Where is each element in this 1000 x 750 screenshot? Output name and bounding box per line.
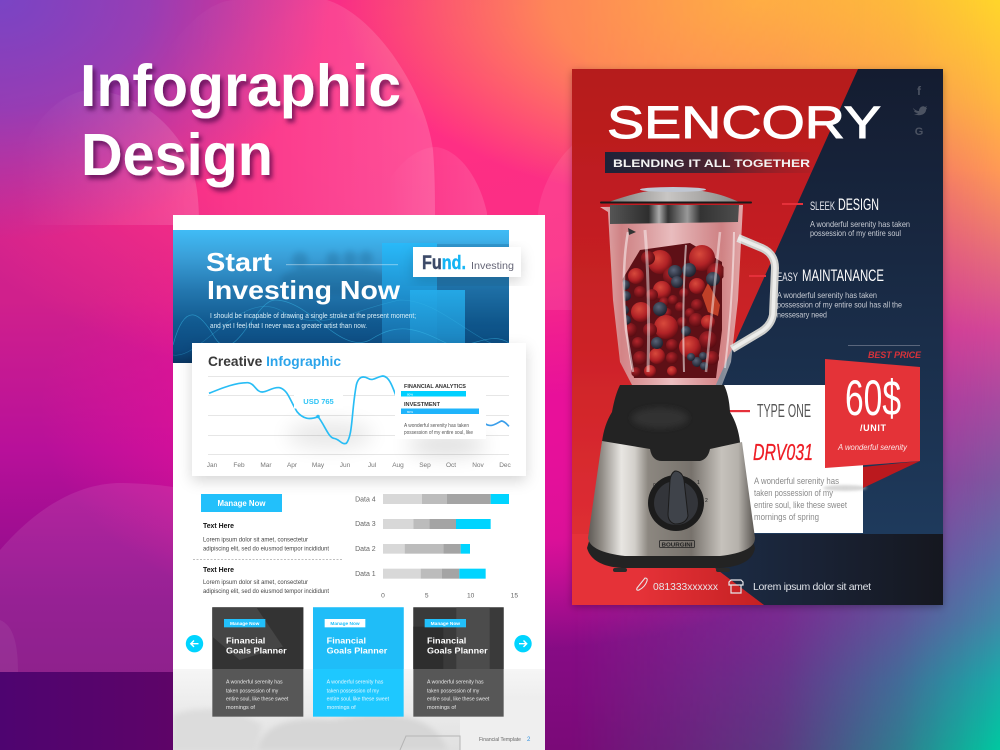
card: financial goals planner middle: Goals Planner: [327, 646, 388, 656]
month axis labels: Oct: [446, 462, 456, 469]
product description: [754, 476, 847, 523]
month axis labels: Apr: [287, 462, 298, 469]
chart heading: Creative Infographic: [208, 353, 341, 369]
product description: mornings of spring: [754, 512, 819, 523]
card: financial goals planner right: Financial: [427, 636, 466, 646]
arrow: next: [514, 635, 532, 652]
text block two: Lorem ipsum dolor sit amet, consectetur: [203, 579, 308, 586]
month axis labels: Jun: [340, 462, 351, 469]
month axis labels: Aug: [392, 462, 404, 469]
card: financial goals planner middle: mornings of: [327, 705, 356, 711]
card: financial goals planner left: Goals Planner: [226, 646, 287, 656]
feature: easy maintanance: [749, 266, 902, 320]
price tag: 60$: [845, 370, 901, 426]
page footer: Financial Template: [479, 737, 521, 743]
header text: and yet I feel that I never was a greater artist than now.: [210, 321, 367, 330]
blender: [587, 187, 775, 572]
control dial: 0: [653, 483, 656, 489]
line chart curve: [209, 376, 509, 455]
title: Design: [81, 122, 273, 188]
stacked bar chart: Data 1: [355, 571, 376, 578]
footer photo: [173, 669, 545, 750]
month axis labels: Nov: [472, 462, 485, 469]
card: financial goals planner left: entire soul, like these sweet: [226, 697, 289, 703]
title: Infographic: [80, 53, 401, 119]
control dial: 1: [697, 480, 700, 486]
card: financial goals planner right: taken possession of my: [427, 688, 479, 694]
contact: phone: 081333xxxxxx: [653, 581, 719, 593]
month axis labels: Jul: [368, 462, 377, 469]
card: financial goals planner right: Manage Now: [431, 621, 460, 627]
blender handle: [732, 238, 775, 349]
contact: shop icon and text: Lorem ipsum dolor sit amet: [753, 581, 871, 593]
type label: TYPE ONE: [757, 401, 811, 421]
price tag: BEST PRICE: [868, 350, 922, 360]
feet: [613, 568, 627, 572]
poster footer band: [572, 534, 943, 605]
logo: fund investing: Fund.: [422, 253, 466, 274]
month axis labels: [206, 462, 510, 468]
month axis labels: Mar: [260, 462, 272, 469]
feature: easy maintanance: EASY: [777, 270, 798, 284]
social icons: f: [917, 84, 922, 98]
header banner: [173, 230, 509, 363]
page footer: 2: [527, 737, 531, 743]
card: financial goals planner middle: A wonderful serenity has: [327, 680, 383, 686]
brand badge: BOURGINI: [662, 542, 693, 548]
feature: easy maintanance: MAINTANANCE: [802, 266, 884, 285]
control dial: [648, 471, 708, 531]
tagline: [605, 152, 810, 173]
stacked bar chart: 0: [381, 592, 385, 599]
text block one: Lorem ipsum dolor sit amet, consectetur: [203, 536, 308, 544]
text block two: Text Here: [203, 567, 234, 574]
callout: usd 765: USD 765: [303, 397, 334, 406]
card: financial goals planner middle: entire soul, like these sweet: [327, 697, 389, 703]
brand name: SENCORY: [607, 97, 881, 148]
contact: phone: [637, 578, 719, 593]
month axis labels: Jan: [207, 462, 218, 469]
jar collar: [610, 205, 739, 224]
blender lid: [600, 187, 752, 204]
card: financial goals planner left: Manage Now: [230, 621, 259, 627]
panel: financial brochure: [173, 215, 545, 750]
feature: sleek design: possession of my entire soul: [810, 229, 901, 238]
white product panel: [700, 385, 867, 533]
blender jar: [600, 187, 752, 385]
stacked bar chart: 10: [467, 592, 475, 599]
card: financial goals planner right: entire soul, like these sweet: [427, 697, 490, 703]
logo: fund investing: Investing: [471, 261, 514, 272]
logo: fund investing: [413, 247, 521, 277]
card: financial goals planner right: [413, 607, 504, 717]
fruit: [619, 243, 725, 378]
feature: easy maintanance: A wonderful serenity has taken: [777, 291, 877, 300]
callout: financial analytics: 80%: [407, 410, 413, 414]
text block one: [203, 523, 329, 552]
price tag: /UNIT: [860, 423, 886, 433]
month axis labels: Feb: [233, 462, 245, 469]
glass ridges: [624, 230, 734, 372]
arrow: previous: [186, 635, 203, 652]
heading: start investing now: Investing Now: [207, 275, 401, 305]
title: [80, 53, 401, 188]
product description: A wonderful serenity has: [754, 476, 839, 487]
text block two: adipiscing elit, sed do eiusmod tempor incididunt: [203, 588, 329, 595]
feature: sleek design: A wonderful serenity has taken: [810, 220, 910, 229]
stacked bar chart: 15: [511, 592, 518, 599]
type label: [729, 401, 811, 421]
heading: start investing now: Start: [206, 247, 272, 277]
header text: I should be incapable of drawing a single stroke at the present moment;: [210, 311, 416, 320]
feature: sleek design: SLEEK: [810, 199, 835, 213]
text block two: [203, 567, 329, 595]
month axis labels: May: [312, 462, 325, 469]
card: financial goals planner middle: [313, 607, 404, 717]
month axis labels: Sep: [419, 462, 431, 469]
card: financial goals planner left: [212, 607, 303, 717]
control dial: 2: [705, 498, 708, 504]
navy diagonal: [700, 69, 943, 534]
card: financial goals planner right: mornings of: [427, 705, 456, 711]
callout: usd 765: [294, 393, 343, 418]
heading: start investing now: [206, 252, 400, 304]
card: financial goals planner middle: Financial: [327, 636, 366, 646]
product description: entire soul, like these sweet: [754, 500, 847, 511]
price tag: [825, 345, 922, 488]
manage now button: Manage Now: [218, 498, 266, 508]
tagline: BLENDING IT ALL TOGETHER: [613, 158, 810, 170]
stacked bar chart: 5: [425, 592, 429, 599]
social icons: G: [915, 126, 923, 138]
callout: financial analytics: [395, 380, 486, 439]
social icons: [913, 84, 927, 138]
month axis labels: Dec: [499, 462, 512, 469]
card: financial goals planner left: mornings of: [226, 705, 255, 711]
brand badge: [660, 540, 694, 548]
card: financial goals planner middle: Manage Now: [330, 621, 360, 627]
panel: sencory poster: [572, 69, 943, 605]
text block one: adipiscing elit, sed do eiusmod tempor incididunt: [203, 546, 329, 552]
card: financial goals planner right: Goals Planner: [427, 646, 488, 656]
stacked bar chart: Data 2: [355, 546, 376, 553]
callout: financial analytics: possession of my entire soul, like: [404, 430, 473, 436]
blender base: [587, 385, 755, 572]
stacked bar chart: [355, 494, 518, 599]
callout: financial analytics: 80%: [407, 392, 413, 396]
manage now button: [201, 494, 282, 512]
stacked bar chart: Data 4: [355, 496, 376, 503]
feature: easy maintanance: nessesary need: [777, 310, 827, 320]
card: financial goals planner middle: taken possession of my: [327, 688, 379, 694]
card: financial goals planner right: A wonderful serenity has: [427, 680, 484, 686]
feature: sleek design: DESIGN: [838, 195, 879, 214]
stacked bar chart: Data 3: [355, 521, 376, 528]
callout: financial analytics: A wonderful serenity has taken: [404, 423, 469, 429]
card: financial goals planner left: Financial: [226, 636, 265, 646]
card: financial goals planner left: taken possession of my: [226, 688, 278, 694]
background bubble shapes: [0, 0, 575, 750]
header text: [210, 312, 416, 330]
price tag: A wonderful serenity: [837, 442, 908, 452]
model number: DRV031: [753, 439, 813, 465]
feature: easy maintanance: possession of my entire soul has all the: [777, 300, 902, 310]
card: financial goals planner left: A wonderful serenity has: [226, 680, 283, 686]
panel: line chart card: [192, 343, 526, 476]
callout: financial analytics: FINANCIAL ANALYTICS: [404, 384, 466, 390]
feature: sleek design: [782, 195, 910, 238]
text block one: Text Here: [203, 523, 234, 530]
callout: financial analytics: INVESTMENT: [404, 402, 441, 408]
product description: taken possession of my: [754, 488, 833, 499]
